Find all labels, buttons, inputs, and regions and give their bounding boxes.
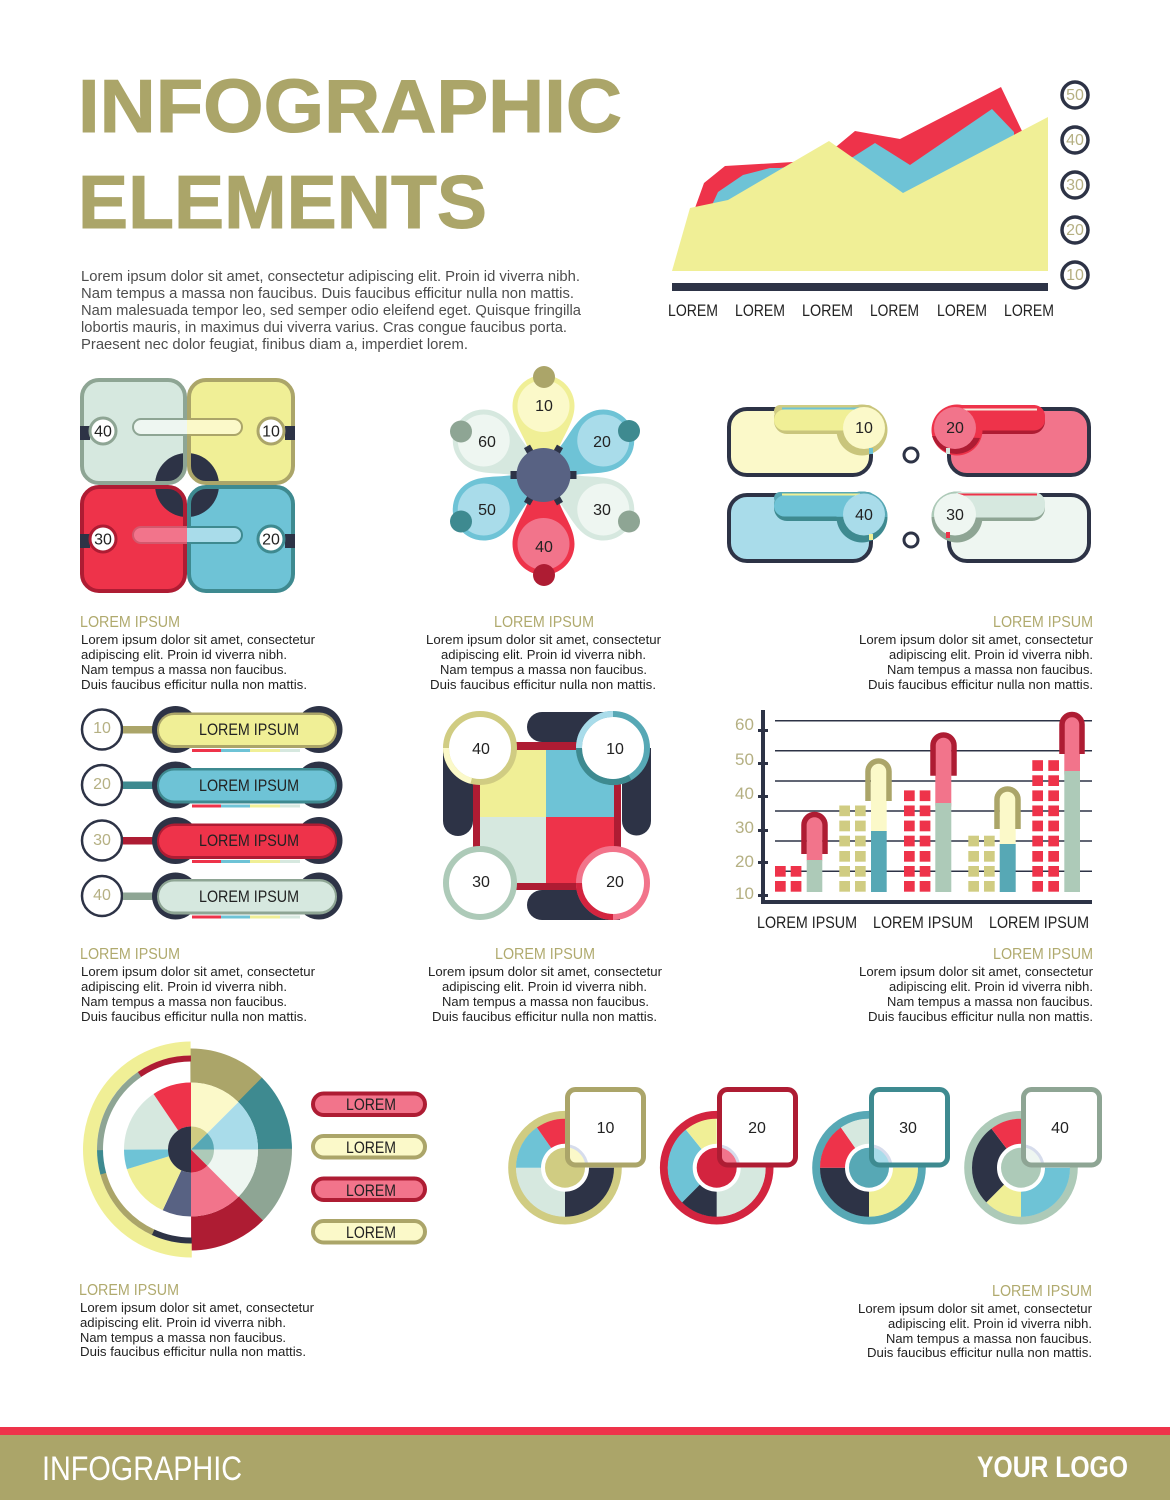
row 20 <box>82 762 342 808</box>
caption: bar chart: adipiscing elit. Proin id viverra nibh. <box>889 979 1093 994</box>
caption: donuts <box>858 1283 1093 1360</box>
value labels <box>94 424 280 548</box>
sunburst legend buttons: LOREM <box>346 1139 396 1157</box>
intro text block: Nam tempus a massa non faucibus. Duis faucibus efficitur nulla non mattis. <box>81 286 574 302</box>
petals <box>441 375 646 575</box>
intro text block: Praesent nec dolor feugiat, finibus diam a, imperdiet lorem. <box>81 337 468 353</box>
circle 20: 20 <box>606 874 624 891</box>
caption: square with corner circles: adipiscing elit. Proin id viverra nibh. <box>442 979 647 994</box>
caption: bar chart: Duis faucibus efficitur nulla non mattis. <box>868 1009 1093 1024</box>
donut 20 <box>664 1090 796 1220</box>
x axis labels <box>757 914 1089 932</box>
caption: donuts: Nam tempus a massa non faucibus. <box>886 1331 1092 1346</box>
petal values: 30 <box>593 502 611 519</box>
petal values: 60 <box>478 434 496 451</box>
circle 20 <box>579 849 647 917</box>
box 10 <box>729 404 888 475</box>
panel: quad squares <box>80 380 295 591</box>
row 20: LOREM IPSUM <box>199 777 299 795</box>
caption: quad squares <box>80 614 316 692</box>
y axis values: 60 <box>735 715 754 734</box>
value labels: 20 <box>262 532 280 548</box>
caption: square with corner circles: Duis faucibus efficitur nulla non mattis. <box>432 1009 657 1024</box>
caption: donuts: Lorem ipsum dolor sit amet, consectetur <box>858 1301 1093 1316</box>
group 4 <box>968 789 1018 892</box>
panel: flower chart <box>441 366 646 586</box>
area chart scale values: 40 <box>1066 132 1084 149</box>
row 30 <box>82 817 342 864</box>
caption: quad squares: Lorem ipsum dolor sit amet, consectetur <box>81 632 316 647</box>
panel: square with corner circles <box>438 702 659 920</box>
caption: bar chart: Lorem ipsum dolor sit amet, consectetur <box>859 964 1094 979</box>
footer: INFOGRAPHIC <box>42 1450 242 1488</box>
box 40 <box>729 492 888 561</box>
y axis values: 40 <box>735 784 754 803</box>
group 3 <box>904 735 954 892</box>
area chart x labels <box>668 302 1054 320</box>
central square <box>473 742 621 890</box>
area chart x labels: LOREM <box>735 302 785 320</box>
dark backing shapes <box>443 712 651 920</box>
y axis values: 50 <box>735 750 754 769</box>
group 2 <box>839 761 889 892</box>
caption: quad squares: Nam tempus a massa non faucibus. <box>81 662 287 677</box>
row 40 <box>82 872 342 920</box>
caption: flower chart: Lorem ipsum dolor sit amet, consectetur <box>426 632 662 647</box>
sunburst legend buttons: LOREM <box>346 1096 396 1114</box>
caption: pill rows: Duis faucibus efficitur nulla non mattis. <box>81 1009 307 1024</box>
petal dots <box>450 366 640 586</box>
caption: bar chart: Nam tempus a massa non faucibus. <box>887 994 1093 1009</box>
row 40: 40 <box>93 887 111 904</box>
donut 40 <box>968 1090 1100 1220</box>
caption: bar chart <box>859 946 1094 1024</box>
row 40: LOREM IPSUM <box>199 888 299 906</box>
donut 30: 30 <box>899 1120 917 1137</box>
caption: pill rows: Lorem ipsum dolor sit amet, consectetur <box>81 964 316 979</box>
caption: flower chart: Duis faucibus efficitur nulla non mattis. <box>430 677 656 692</box>
petal values: 40 <box>535 539 553 556</box>
box 20 <box>932 404 1089 475</box>
value labels: 40 <box>94 424 112 440</box>
area chart x labels: LOREM <box>668 302 718 320</box>
caption: donuts: Duis faucibus efficitur nulla non mattis. <box>867 1345 1092 1360</box>
donut 20: 20 <box>748 1120 766 1137</box>
panel: bar chart <box>735 710 1092 932</box>
circle 10 <box>567 702 659 794</box>
area chart x labels: LOREM <box>1004 302 1054 320</box>
caption: square with corner circles: LOREM IPSUM <box>495 946 595 963</box>
area chart scale values: 30 <box>1066 177 1084 194</box>
area chart scale values: 20 <box>1066 222 1084 239</box>
area chart <box>668 82 1088 320</box>
caption: speech boxes: LOREM IPSUM <box>993 614 1093 631</box>
caption: quad squares: Duis faucibus efficitur nulla non mattis. <box>81 677 307 692</box>
value badges <box>90 418 284 552</box>
caption: speech boxes: Nam tempus a massa non faucibus. <box>887 662 1093 677</box>
caption: quad squares: adipiscing elit. Proin id viverra nibh. <box>81 647 287 662</box>
caption: speech boxes: adipiscing elit. Proin id viverra nibh. <box>889 647 1093 662</box>
row 30: LOREM IPSUM <box>199 832 299 850</box>
caption: sunburst chart: LOREM IPSUM <box>79 1282 179 1299</box>
footer: YOUR LOGO <box>977 1451 1128 1484</box>
box 30: 30 <box>946 507 964 524</box>
caption: square with corner circles: Lorem ipsum dolor sit amet, consectetur <box>428 964 663 979</box>
petal values: 20 <box>593 434 611 451</box>
caption: speech boxes <box>859 614 1094 692</box>
caption: sunburst chart: adipiscing elit. Proin id viverra nibh. <box>80 1315 286 1330</box>
row 10: 10 <box>93 720 111 737</box>
caption: bar chart: LOREM IPSUM <box>993 946 1093 963</box>
caption: sunburst chart: Duis faucibus efficitur nulla non mattis. <box>80 1344 306 1359</box>
y axis values <box>735 715 754 903</box>
caption: donuts: LOREM IPSUM <box>992 1283 1092 1300</box>
petal values <box>478 398 611 556</box>
box 40: 40 <box>855 507 873 524</box>
caption: flower chart: adipiscing elit. Proin id viverra nibh. <box>441 647 646 662</box>
panel: sunburst chart <box>65 1023 317 1276</box>
title <box>78 64 622 244</box>
caption: sunburst chart <box>79 1282 315 1359</box>
circle 30 <box>446 849 514 917</box>
y axis values: 30 <box>735 818 754 837</box>
area chart x labels: LOREM <box>870 302 919 320</box>
row 10: LOREM IPSUM <box>199 721 299 739</box>
petal values: 10 <box>535 398 553 415</box>
caption: pill rows: adipiscing elit. Proin id viverra nibh. <box>81 979 287 994</box>
area chart scale circles <box>1062 82 1088 288</box>
circle 10: 10 <box>606 741 624 758</box>
group 1 <box>775 814 825 892</box>
caption: pill rows <box>80 946 316 1024</box>
caption: pill rows: LOREM IPSUM <box>80 946 180 963</box>
axes <box>758 710 1092 904</box>
area chart x labels: LOREM <box>937 302 987 320</box>
y axis values: 10 <box>735 884 754 903</box>
donut 10 <box>512 1090 644 1220</box>
intro text block: Lorem ipsum dolor sit amet, consectetur adipiscing elit. Proin id viverra nibh. <box>81 269 580 285</box>
circle 40: 40 <box>472 741 490 758</box>
top pill <box>133 419 242 435</box>
caption: quad squares: LOREM IPSUM <box>80 614 180 631</box>
caption: square with corner circles: Nam tempus a massa non faucibus. <box>442 994 649 1009</box>
value labels: 30 <box>94 532 112 548</box>
sunburst legend buttons <box>313 1094 425 1242</box>
value labels: 10 <box>262 424 280 440</box>
caption: square with corner circles <box>428 946 663 1024</box>
intro text block: Nam malesuada tempor leo, sed semper odio eleifend eget. Quisque fringilla <box>81 303 582 319</box>
title: INFOGRAPHIC <box>78 64 622 148</box>
panel: pill rows <box>82 706 342 920</box>
sunburst legend buttons: LOREM <box>346 1224 396 1242</box>
dark side tabs <box>80 426 295 548</box>
caption: flower chart: Nam tempus a massa non faucibus. <box>440 662 647 677</box>
grid lines <box>775 721 1092 871</box>
area chart x labels: LOREM <box>802 302 853 320</box>
y axis values: 20 <box>735 852 754 871</box>
area chart scale values <box>1066 87 1084 284</box>
box 20: 20 <box>946 420 964 437</box>
donut 30 <box>816 1090 948 1220</box>
row 10 <box>82 706 342 753</box>
area chart scale values: 50 <box>1066 87 1084 104</box>
sunburst legend buttons: LOREM <box>346 1182 396 1200</box>
circle 40 <box>438 706 522 790</box>
intro text block <box>81 269 582 353</box>
bottom pill <box>133 527 242 543</box>
title: ELEMENTS <box>78 160 487 244</box>
x axis labels: LOREM IPSUM <box>757 914 857 932</box>
row 30: 30 <box>93 832 111 849</box>
intro text block: lobortis mauris, in maximus dui viverra varius. Cras congue faucibus porta. <box>81 320 567 336</box>
caption: donuts: adipiscing elit. Proin id viverra nibh. <box>888 1316 1092 1331</box>
caption: flower chart <box>426 614 662 692</box>
circle 30: 30 <box>472 874 490 891</box>
x axis labels: LOREM IPSUM <box>873 914 973 932</box>
donut 40: 40 <box>1051 1120 1069 1137</box>
hub <box>516 448 570 502</box>
caption: flower chart: LOREM IPSUM <box>494 614 594 631</box>
box 30 <box>932 492 1089 561</box>
panel: speech boxes <box>729 404 1089 561</box>
group 5 <box>1032 715 1082 892</box>
caption: speech boxes: Duis faucibus efficitur nulla non mattis. <box>868 677 1093 692</box>
caption: speech boxes: Lorem ipsum dolor sit amet, consectetur <box>859 632 1094 647</box>
caption: pill rows: Nam tempus a massa non faucibus. <box>81 994 287 1009</box>
row 20: 20 <box>93 776 111 793</box>
footer <box>0 1427 1170 1500</box>
connector circles <box>904 448 918 547</box>
caption: sunburst chart: Nam tempus a massa non faucibus. <box>80 1330 286 1345</box>
donut 10: 10 <box>597 1120 614 1137</box>
area chart scale values: 10 <box>1066 267 1084 284</box>
box 10: 10 <box>855 420 873 437</box>
caption: sunburst chart: Lorem ipsum dolor sit amet, consectetur <box>80 1300 315 1315</box>
x axis labels: LOREM IPSUM <box>989 914 1089 932</box>
petal values: 50 <box>478 502 496 519</box>
